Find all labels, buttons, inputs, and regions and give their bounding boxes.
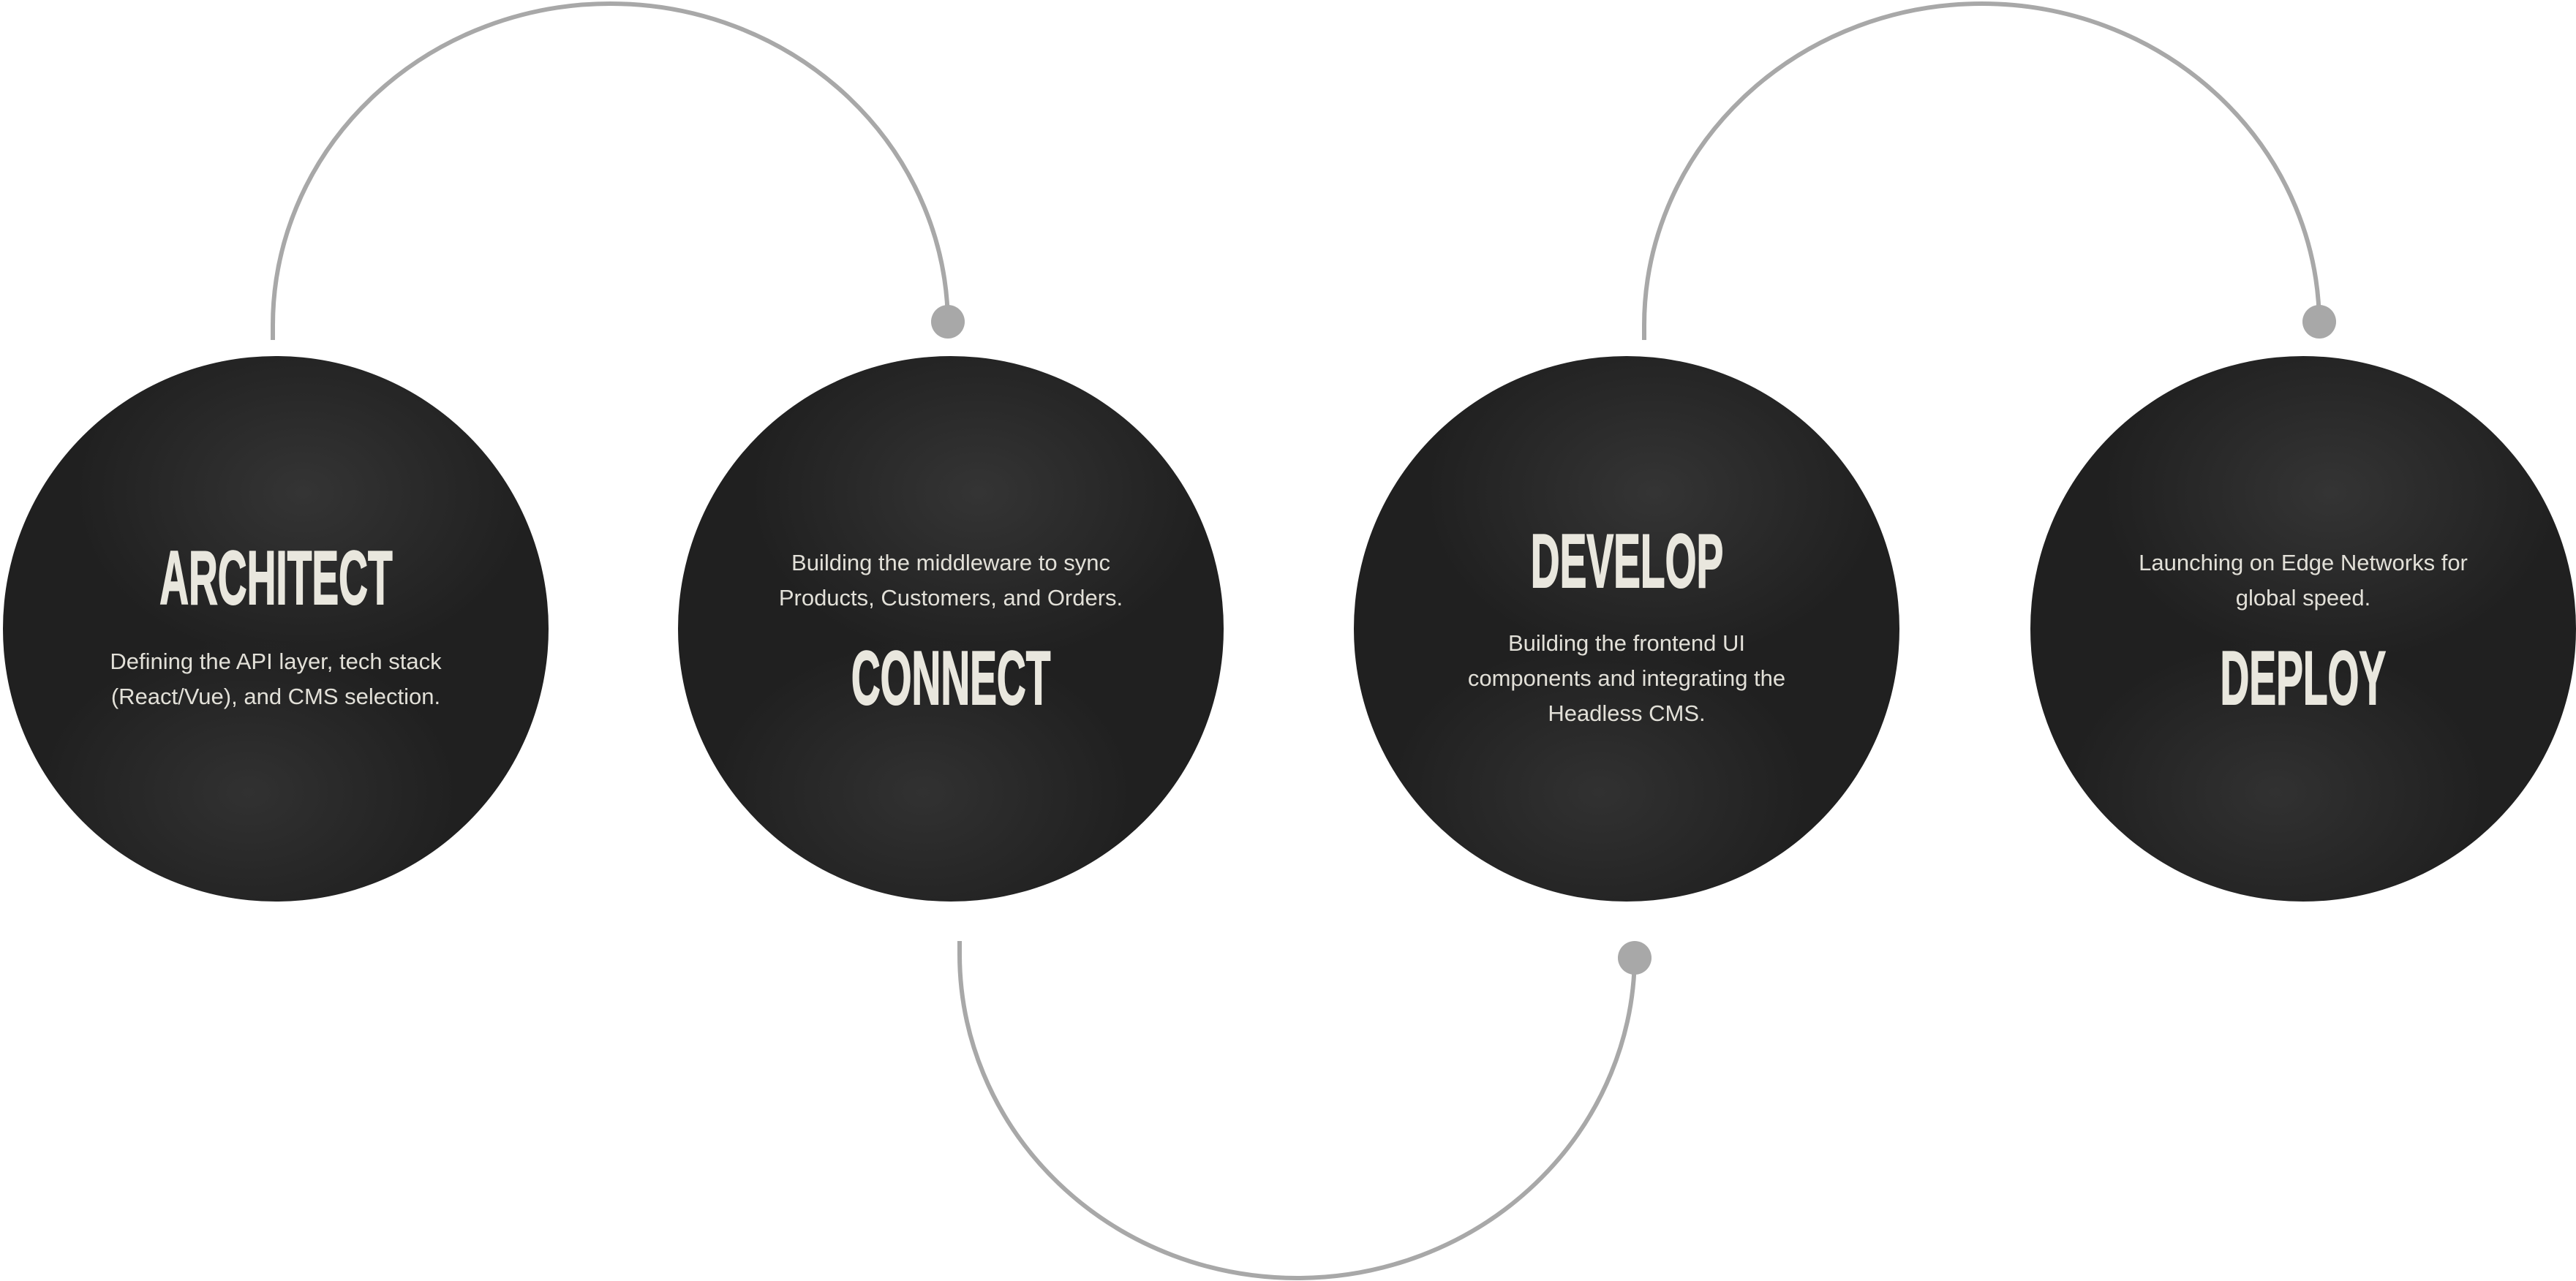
text: develop description: Building the frontend UI: [1508, 630, 1745, 656]
text: architect description: Defining the API layer, tech stack: [110, 649, 442, 674]
text: deploy description: global speed.: [2236, 585, 2370, 611]
text: deploy description: Launching on Edge Networks for: [2139, 550, 2468, 575]
text: develop description: Headless CMS.: [1548, 700, 1706, 726]
arc: develop to deploy: [1644, 4, 2336, 340]
heading: develop: DEVELOP: [1530, 519, 1723, 604]
text: deploy description: [2139, 550, 2468, 611]
panel: develop: [1354, 356, 1899, 902]
text: architect description: [110, 649, 442, 709]
heading: deploy: DEPLOY: [2221, 636, 2386, 721]
text: architect description: (React/Vue), and CMS selection.: [111, 684, 440, 709]
text: connect description: [779, 550, 1123, 611]
text: develop description: components and integrating the: [1468, 665, 1785, 691]
arc: connect to develop: [960, 941, 1652, 1278]
text: connect description: Products, Customers, and Orders.: [779, 585, 1123, 611]
arc: architect to connect: [273, 4, 965, 340]
text: connect description: Building the middleware to sync: [791, 550, 1110, 575]
panel: deploy: [2030, 356, 2576, 902]
panel: architect: [3, 356, 549, 902]
text: develop description: [1468, 630, 1785, 726]
heading: architect: ARCHITECT: [159, 536, 392, 621]
heading: connect: CONNECT: [851, 636, 1050, 721]
panel: connect: [678, 356, 1224, 902]
